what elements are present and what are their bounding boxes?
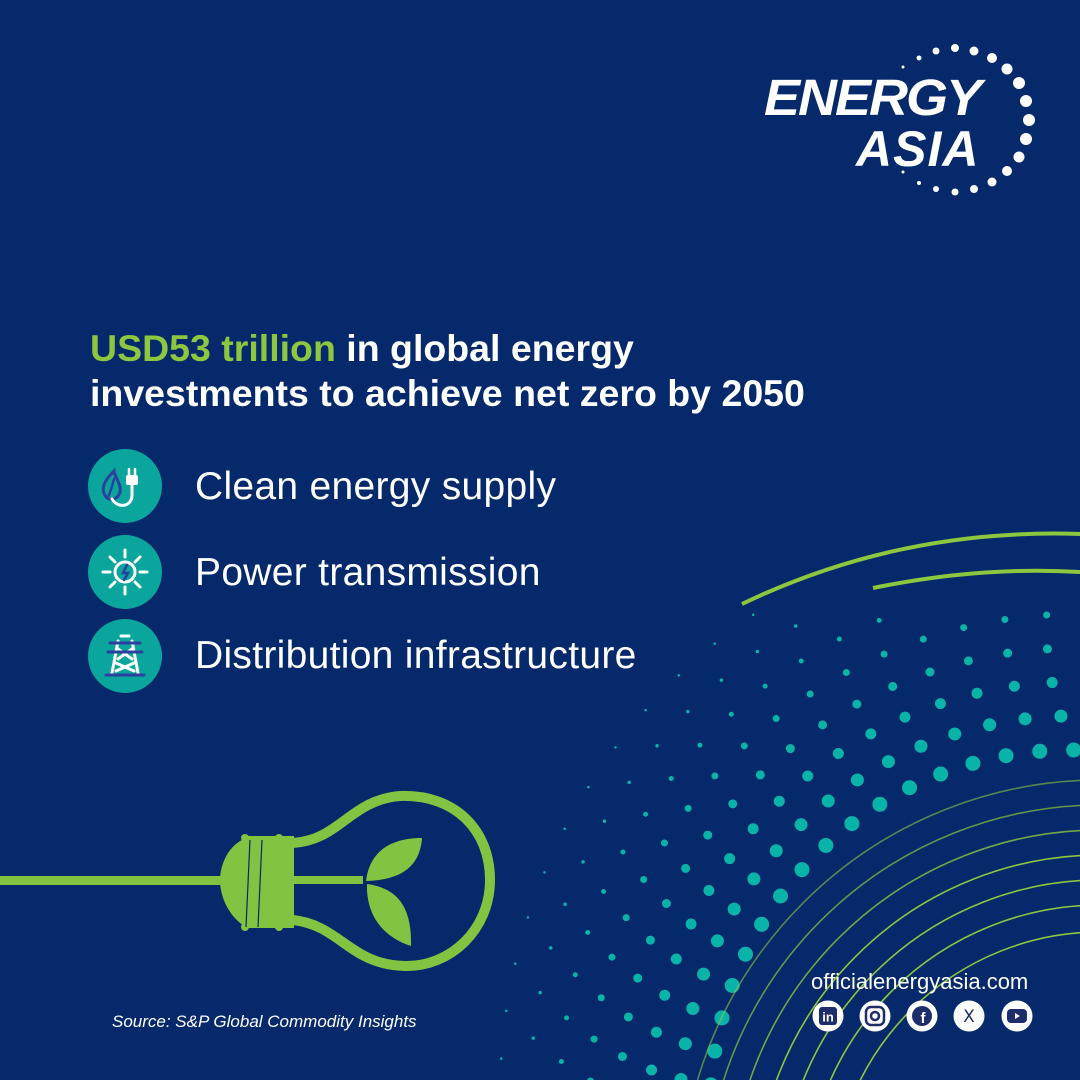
icon: distribution <box>88 619 162 693</box>
source: Source: S&P Global Commodity Insights <box>112 1012 417 1031</box>
icon: power transmission <box>88 535 162 609</box>
social icons: X <box>963 1007 975 1027</box>
social icons <box>812 1000 1032 1032</box>
headline <box>90 327 805 414</box>
logo dots <box>902 44 1035 196</box>
text: distribution infrastructure: Distribution infrastructure <box>195 634 637 677</box>
dotted swirl pattern <box>500 512 1080 1080</box>
website: officialenergyasia.com <box>811 969 1028 994</box>
logo text: ENERGY <box>764 70 980 126</box>
text: power transmission: Power transmission <box>195 551 541 594</box>
icon: clean energy <box>88 449 162 523</box>
logo <box>764 44 1035 196</box>
illustration: light bulb plug <box>0 790 495 971</box>
social icons: in <box>822 1010 834 1024</box>
text: clean energy supply: Clean energy supply <box>195 465 556 508</box>
logo: ASIA <box>856 121 979 177</box>
social icons: f <box>920 1010 926 1027</box>
headline: USD53 trillion in global energy <box>90 327 634 369</box>
thin green arcs <box>680 780 1080 1080</box>
headline: investments to achieve net zero by 2050 <box>90 372 805 414</box>
big green arcs <box>742 534 1080 604</box>
